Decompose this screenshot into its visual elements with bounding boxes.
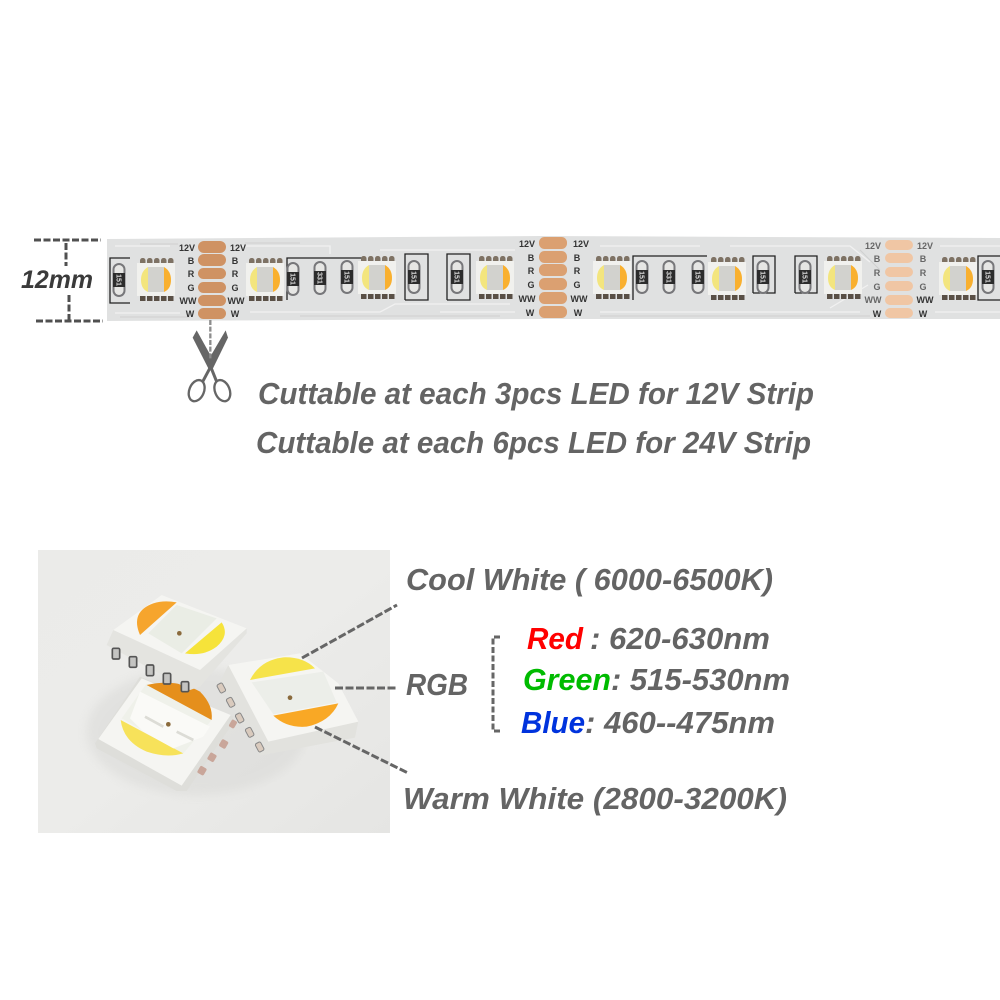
bracket: RGB wavelengths [493,637,500,731]
callout line: RGB [335,686,397,690]
icon: scissors [186,320,233,404]
solder pads: third cut point [885,240,913,318]
label: RGB: RGB [406,667,468,702]
pad labels: second cut point: 12V [573,239,589,249]
resistor codes: 151 [410,271,416,283]
pad labels: second cut point: W [574,308,583,318]
pad labels: second cut point: 12V [519,239,535,249]
resistor codes: 151 [984,271,990,283]
pad labels: third cut point: R [874,268,881,278]
text: cutting instructions: Cuttable at each 6pcs LED for 24V Strip [256,425,811,460]
pad labels: first cut point: 12V [230,243,246,253]
pad labels: third cut point: B [920,254,927,264]
pad labels: second cut point: WW [518,294,536,304]
pad labels: first cut point: W [186,309,195,319]
pad labels: second cut point: G [573,280,581,290]
solder pads: first cut point [198,241,226,319]
LED chip: right [216,653,358,756]
LED chips on strip [137,256,977,301]
resistor codes: 151 [758,271,766,283]
label: cool white: Cool White ( 6000-6500K) [406,562,773,597]
pad labels: second cut point: W [526,308,535,318]
resistor component outlines [110,254,1000,303]
pad labels: first cut point: WW [180,296,197,306]
pad labels: first cut point: W [231,309,240,319]
solder pads: second cut point [539,237,567,318]
photo: SMD LED chips [38,550,390,833]
resistor codes: 331 [664,271,672,283]
resistor codes: 151 [288,273,296,285]
pad labels: first cut point: G [187,283,195,293]
text: blue wavelength: Blue [521,705,585,740]
dimension marker: 12mm [21,240,103,321]
pad labels: third cut point: 12V [917,241,933,251]
pad labels: second cut point: B [574,253,581,263]
resistor codes: 151 [114,274,122,286]
pad labels: third cut point: R [920,268,927,278]
pad labels: first cut point [179,243,246,319]
text: red wavelength: Red [527,621,584,656]
pad labels: second cut point: R [528,266,535,276]
pad labels: second cut point: B [528,253,535,263]
LED chip: top [107,595,247,692]
LED chip: bottom left [95,677,238,791]
pad labels: first cut point: WW [228,296,245,306]
resistor codes: 151 [342,271,350,283]
dimension marker: 12mm: 12mm [21,266,93,294]
resistor codes: 151 [638,271,644,283]
text: green wavelength [523,662,790,697]
panel: LED strip [107,236,1000,321]
text: blue wavelength: : 460--475nm [585,705,775,740]
pad labels: second cut point: G [527,280,535,290]
resistor codes [114,271,990,286]
label: warm white: Warm White (2800-3200K) [403,781,787,816]
pad labels: second cut point: R [574,266,581,276]
resistor codes: 151 [800,271,808,283]
pad labels: third cut point: 12V [865,241,881,251]
text: cutting instructions [256,376,814,460]
pad labels: second cut point: WW [570,294,588,304]
text: green wavelength: Green [523,662,611,697]
resistor codes: 151 [452,271,460,283]
pad labels: second cut point [518,239,589,318]
pad labels: first cut point: R [232,269,239,279]
resistor codes: 151 [694,271,700,283]
callout line: cool white [302,605,397,658]
resistor codes: 331 [316,272,322,284]
pad labels: third cut point: WW [916,295,934,305]
callout line: warm white [315,727,408,773]
pad labels: third cut point: W [873,309,882,319]
pad labels: third cut point: W [919,309,928,319]
text: red wavelength: : 620-630nm [590,621,770,656]
pad labels: third cut point [864,241,934,319]
pad labels: first cut point: R [188,269,195,279]
pad labels: first cut point: B [232,256,239,266]
pad labels: first cut point: G [231,283,239,293]
resistors [112,260,994,297]
pad labels: third cut point: B [874,254,881,264]
pad labels: third cut point: WW [864,295,882,305]
text: cutting instructions: Cuttable at each 3pcs LED for 12V Strip [258,376,814,411]
pad labels: third cut point: G [873,282,881,292]
pad labels: first cut point: 12V [179,243,195,253]
pad labels: third cut point: G [919,282,927,292]
pad labels: first cut point: B [188,256,195,266]
text: green wavelength: : 515-530nm [611,662,790,697]
